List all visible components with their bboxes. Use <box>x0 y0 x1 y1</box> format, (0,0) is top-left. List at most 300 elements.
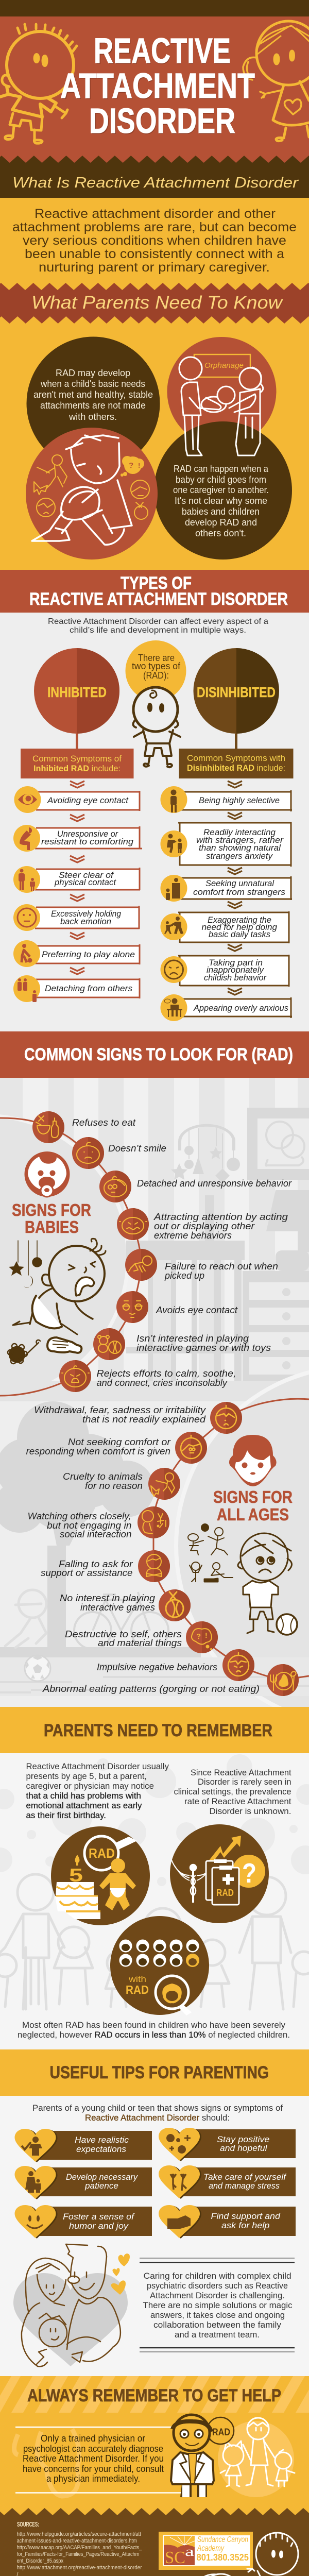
item: unresponsive: resistant to comforting <box>41 837 134 846</box>
title: DISORDER <box>90 102 235 142</box>
heading: parents need to know: What Parents Need To Know <box>31 293 284 313</box>
icon: clipboard: RAD <box>216 1888 234 1898</box>
background: stethoscope <box>14 2429 79 2496</box>
label: falling to ask: Falling to ask for <box>59 1559 133 1569</box>
item: interacting with strangers: strangers anxiety <box>206 851 273 861</box>
tip: stay positive: Stay positive <box>217 2134 270 2144</box>
background: parents section <box>0 1753 309 2049</box>
circle: inhibited <box>34 648 119 749</box>
heading: signs for all ages: SIGNS FOR <box>213 1487 293 1506</box>
text: with RAD: with <box>128 1974 146 1984</box>
label: not seeking comfort: Not seeking comfort or <box>68 1437 171 1447</box>
heading: signs for babies <box>12 1200 91 1236</box>
label: detached: Detached and unresponsive behavior <box>137 1178 292 1189</box>
item: childish behaviour <box>161 955 289 987</box>
icon: girl doodle <box>243 21 309 141</box>
icon: rejects calming <box>59 1360 91 1392</box>
icon: frowning faces and ball <box>37 480 149 519</box>
title <box>60 31 255 142</box>
icon: baby bottle <box>47 1337 81 1353</box>
heading: sources: SOURCES: <box>17 2520 39 2528</box>
label: rejects calming: and connect, cries inconsolably <box>97 1378 228 1388</box>
logo: Sundance Canyon Academy: Academy <box>197 2544 225 2553</box>
text: usual onset: presents by age 5, but a parent, <box>26 1772 147 1781</box>
panel: common signs heading <box>0 1031 309 1078</box>
circle: RAD may develop <box>27 337 160 470</box>
circle: disinhibited: DISINHIBITED <box>197 684 276 700</box>
item: play alone: Preferring to play alone <box>42 950 135 959</box>
icon: doctor: RAD <box>212 2427 230 2438</box>
heading: signs for all ages: ALL AGES <box>217 1505 289 1524</box>
label: doesn't smile: Doesn’t smile <box>108 1143 166 1154</box>
box: inhibited symptoms heading: Common Symptoms of <box>32 754 122 764</box>
icon: child face <box>229 1435 277 1486</box>
box: inhibited symptoms heading <box>21 749 134 778</box>
text: prevalence <box>174 1768 291 1816</box>
item: unresponsive <box>13 825 142 852</box>
top bar <box>0 0 309 16</box>
icon: rattle <box>8 1340 40 1364</box>
label: not interested in toys: interactive games or with toys <box>136 1343 271 1353</box>
icon: caduceus <box>171 1860 214 1903</box>
icon: magnifier <box>84 1836 137 1870</box>
circle: age 5 birthday <box>51 1826 150 1925</box>
text: neglected children: neglected, however RAD occurs in less than 10% of neglected children. <box>18 2030 290 2040</box>
tip: patience: Develop necessary <box>66 2172 138 2182</box>
label: destructive: Destructive to self, others <box>65 1629 182 1639</box>
logo: Sundance Canyon Academy: SC <box>165 2548 185 2567</box>
icon: baby face with pacifier <box>25 1151 70 1197</box>
text: usual onset: emotional attachment as early <box>26 1801 142 1810</box>
label: destructive: and material things <box>98 1638 182 1648</box>
icon: watching others <box>138 1506 169 1538</box>
panel: disinhibited column <box>161 648 294 1021</box>
text: trained physician: psychologist can accurately diagnose <box>23 2444 163 2454</box>
icon: sad sitting boy <box>32 435 132 545</box>
text: caring for children: Caring for children with complex child <box>144 2271 291 2281</box>
icon: orphanage sign <box>194 354 250 377</box>
icon: rising arrow <box>209 1836 241 1863</box>
text: caregiver: RAD can happen when a <box>174 464 269 474</box>
text: prevalence: rate of Reactive Attachment <box>184 1797 291 1806</box>
tip: stay positive <box>159 2128 296 2161</box>
label: attracting attention: extreme behaviors <box>154 1230 232 1241</box>
callout: two types: There are <box>138 653 175 663</box>
text: source links <box>16 2531 142 2576</box>
text: prevalence: clinical settings, the prevalence <box>174 1787 291 1797</box>
text: tips intro: Parents of a young child or teen that shows signs or symptoms of <box>32 2103 283 2113</box>
item: highly selective: Being highly selective <box>199 795 280 805</box>
icon: no interest in playing <box>159 1589 191 1621</box>
label: abnormal eating: Abnormal eating patterns (gorging or not eating) <box>42 1684 260 1694</box>
text: definition: very serious conditions when children have <box>23 233 286 248</box>
icon: clipboard <box>206 1859 239 1905</box>
text: usual onset: Reactive Attachment Disorder usually <box>26 1762 169 1771</box>
icon: orphanage sign: Orphanage <box>204 361 244 370</box>
tip: take care of yourself: Take care of yourself <box>203 2172 287 2182</box>
label: cruelty to animals: for no reason <box>85 1481 143 1491</box>
title: ATTACHMENT <box>60 66 255 106</box>
circle: disinhibited <box>194 648 279 749</box>
label: avoids eye contact: Avoids eye contact <box>156 1305 238 1315</box>
text: source links: http://www.attachment.org/reactive-attachment-disorder <box>16 2565 142 2571</box>
text: definition: attachment problems are rare, but can become <box>12 220 297 234</box>
zigzag edge of header <box>0 156 309 163</box>
text: definition: been unable to consistently connect with a <box>25 247 284 261</box>
background: park <box>0 1364 309 1727</box>
text: prevalence: Disorder is unknown. <box>209 1807 291 1816</box>
item: holding back emotion <box>13 904 140 931</box>
icon: falling to ask <box>138 1550 170 1582</box>
tip: humor and joy <box>14 2205 152 2239</box>
item: interacting with strangers <box>161 822 291 867</box>
tip: stay positive: and hopeful <box>220 2143 268 2153</box>
tip: realistic expectations <box>14 2129 152 2162</box>
text: caregiver <box>173 464 269 538</box>
icon: kicking boy <box>34 455 67 495</box>
panel: parents need to remember heading <box>0 1707 309 1753</box>
text: basic needs: with others. <box>68 412 117 422</box>
label: not seeking comfort: responding when comfort is given <box>26 1446 170 1456</box>
label: not seeking comfort <box>26 1437 171 1456</box>
icon: helping hand <box>167 2215 191 2229</box>
label: impulsive: Impulsive negative behaviors <box>97 1662 217 1672</box>
callout: two types: (RAD): <box>143 670 169 681</box>
icon: destructive: ? <box>196 1632 201 1641</box>
label: destructive <box>65 1629 182 1648</box>
logo: Sundance Canyon Academy <box>159 2532 253 2570</box>
icon: baby in diaper <box>99 1858 136 1910</box>
text: usual onset: caregiver or physician may notice <box>26 1782 154 1791</box>
timeline: signs for babies <box>0 1111 292 1396</box>
text: definition: nurturing parent or primary caregiver. <box>39 260 270 275</box>
label: falling to ask <box>41 1559 133 1578</box>
tip: realistic expectations: expectations <box>76 2144 127 2154</box>
text: basic needs: attachments are not made <box>40 400 146 411</box>
label: rejects calming <box>97 1368 236 1388</box>
box: disinhibited symptoms heading: Disinhibited RAD include: <box>187 763 285 773</box>
text: usual onset: that a child has problems with <box>26 1791 141 1801</box>
icon: thought bubble: ? <box>129 461 133 470</box>
tip: find support: ask for help <box>221 2221 270 2230</box>
logo: Sundance Canyon Academy: a <box>185 2544 195 2559</box>
item: comfort from strangers: Seeking unnatural <box>205 878 274 888</box>
tip: humor and joy: humor and joy <box>69 2221 129 2231</box>
label: rejects calming: Rejects efforts to calm, soothe, <box>97 1368 236 1379</box>
icon: destructive: ! <box>205 1631 208 1639</box>
callout: two types <box>126 640 186 701</box>
item: play alone <box>13 940 140 967</box>
icon: doctor <box>171 2415 234 2497</box>
illustration: sad boy with playing children <box>188 1524 297 1635</box>
label: failure to reach <box>164 1261 278 1281</box>
icon: thought bubble: ! <box>138 462 140 469</box>
item: childish behaviour: inappropriately <box>207 965 264 975</box>
label: watching others: Watching others closely, <box>28 1511 131 1521</box>
text: source links: ent_Disorder_85.aspx <box>16 2558 63 2564</box>
circle: sad boy illustration <box>26 428 158 560</box>
label: no interest in playing: interactive games <box>80 1602 155 1613</box>
text: neglected children <box>18 2020 290 2040</box>
label: failure to reach: picked up <box>164 1270 204 1281</box>
item: holding back emotion: Excessively holding <box>51 909 121 919</box>
background: soccer ball <box>25 1655 50 1681</box>
label: no interest in playing <box>60 1593 155 1613</box>
label: falling to ask: support or assistance <box>41 1568 133 1578</box>
item: exaggerating need: need for help doing <box>202 922 278 932</box>
background: bicycle <box>74 1592 168 1649</box>
text: caring for children: Attachment Disorder is challenging. <box>150 2291 285 2300</box>
label: not interested in toys <box>136 1333 271 1353</box>
heading: types: TYPES OF <box>121 573 192 593</box>
item: holding back emotion: back emotion <box>60 917 111 926</box>
text: caring for children: psychiatric disorders such as Reactive <box>147 2281 288 2291</box>
text: tips intro <box>32 2103 283 2123</box>
label: withdrawal <box>34 1405 206 1425</box>
icon: impulsive <box>222 1649 254 1681</box>
icon: parent and child <box>25 2171 41 2193</box>
text: caregiver: develop RAD and <box>185 517 257 528</box>
zigzag edge of footer <box>0 2508 309 2515</box>
background: sitting boy <box>5 1590 46 1648</box>
icon: magnifier: RAD <box>89 1845 115 1861</box>
panel: what is RAD heading band <box>0 163 309 198</box>
item: exaggerating need: Exaggerating the <box>208 915 271 925</box>
item: childish behaviour: Taking part in <box>209 958 263 968</box>
heading: what is: What Is Reactive Attachment Disorder <box>12 175 299 191</box>
text: with RAD: RAD <box>126 1983 149 1996</box>
icon: birthday cake: 5 <box>69 1865 83 1886</box>
circle: prevalence unknown <box>170 1824 269 1923</box>
tip: find support: Find support and <box>211 2211 281 2221</box>
item: exaggerating need: basic daily tasks <box>209 929 270 939</box>
item: overly anxious <box>161 994 292 1021</box>
icon: ten children grid <box>119 1940 199 1967</box>
text: usual onset <box>26 1762 169 1820</box>
circle: fewer than 10 percent <box>110 1916 209 2015</box>
text: neglected children: Most often RAD has been found in children who have been severely <box>22 2020 285 2030</box>
icon: family circle <box>218 2418 295 2497</box>
text: caregiver: one caregiver to another. <box>173 485 269 495</box>
item: interacting with strangers: than showing natural <box>199 843 281 853</box>
background: mobile <box>171 1124 240 1183</box>
heading: signs for all ages <box>213 1487 293 1524</box>
heading: signs for babies: BABIES <box>25 1217 79 1236</box>
circle: inhibited: INHIBITED <box>47 684 107 700</box>
label: cruelty to animals: Cruelty to animals <box>63 1471 143 1482</box>
label: no interest in playing: No interest in playing <box>60 1593 155 1603</box>
box: disinhibited symptoms heading <box>179 749 294 778</box>
text: types intro: Reactive Attachment Disorder can affect every aspect of a <box>48 617 268 626</box>
item: childish behaviour: childish behavior <box>204 973 267 982</box>
text: basic needs: when a child's basic needs <box>40 379 145 389</box>
text: prevalence: Disorder is rarely seen in <box>198 1777 291 1787</box>
icon: magnified child <box>156 1976 192 2015</box>
icon: boy shrugging <box>133 687 180 767</box>
item: interacting with strangers: Readily interacting <box>203 827 276 837</box>
background: framed mother and child <box>266 1122 304 1165</box>
text: trained physician <box>23 2433 164 2484</box>
label: not interested in toys: Isn’t interested in playing <box>136 1333 249 1344</box>
panel: types body background <box>0 613 309 1031</box>
icon: cruelty to animals <box>148 1468 180 1500</box>
text: tips intro: Reactive Attachment Disorder should: <box>85 2113 230 2123</box>
heading: signs for babies: SIGNS FOR <box>12 1200 91 1219</box>
item: comfort from strangers <box>161 875 292 902</box>
item: highly selective <box>161 786 292 813</box>
tip: patience: patience <box>84 2181 118 2191</box>
illustration: crying baby <box>9 1239 106 1334</box>
background: gray family <box>0 1874 309 2009</box>
illustration: adults handing over baby <box>179 357 263 455</box>
text: definition: Reactive attachment disorder and other <box>35 207 276 221</box>
circle: caregiver text <box>154 421 292 560</box>
panel: types of RAD heading <box>0 570 309 613</box>
label: cruelty to animals <box>63 1471 143 1491</box>
text: caring for children: and a treatment team. <box>175 2330 260 2340</box>
box: disinhibited symptoms heading: Common Symptoms with <box>187 753 285 763</box>
item: interacting with strangers: with strangers, rather <box>196 835 284 845</box>
background: nursery <box>0 1078 309 1400</box>
label: withdrawal: that is not readily explained <box>82 1414 206 1425</box>
panel: yellow background <box>0 324 309 570</box>
icon: smile <box>27 2215 43 2228</box>
panel: inhibited column <box>13 648 142 1002</box>
item: detaching from others: Detaching from others <box>45 984 133 993</box>
text: caring for children: There are no simple solutions or magic <box>143 2300 293 2310</box>
icon: baby with tick <box>22 2137 42 2156</box>
icon: refuses to eat <box>32 1111 64 1143</box>
label: failure to reach: Failure to reach out when <box>165 1261 278 1272</box>
label: watching others <box>28 1511 132 1539</box>
icon: abnormal eating <box>267 1664 299 1696</box>
tip: realistic expectations: Have realistic <box>75 2135 129 2145</box>
icon: yoga figures <box>170 2174 186 2191</box>
icon: boy doodle <box>0 24 77 143</box>
icon: thought bubble <box>121 456 144 477</box>
text: types intro <box>48 617 268 635</box>
panel: footer <box>0 2515 309 2576</box>
icon: failure to reach <box>125 1249 157 1281</box>
icon: white boy doodle <box>247 2533 298 2576</box>
icon: birthday cake <box>55 1855 100 1919</box>
icon: question badge: ? <box>242 1858 256 1889</box>
item: steer clear <box>13 866 140 893</box>
callout: two types: two types of <box>132 661 181 671</box>
text: caring for children: collaboration between the family <box>153 2320 281 2330</box>
label: watching others: social interaction <box>60 1529 132 1539</box>
heading: useful tips: USEFUL TIPS FOR PARENTING <box>49 2063 269 2082</box>
panel: what is RAD text <box>0 198 309 283</box>
text: with RAD <box>126 1974 149 1996</box>
title: REACTIVE <box>95 32 231 72</box>
circle: orphanage illustration <box>167 337 276 446</box>
panel: always remember <box>0 2376 309 2509</box>
text: basic needs: RAD may develop <box>56 368 130 378</box>
text: usual onset: as their first birthday. <box>26 1811 106 1820</box>
illustration: hugging family <box>13 2244 130 2366</box>
title: REACTIVE <box>94 31 231 71</box>
text: source links: for_Families/Facts-for_Families_Pages/Reactive_Attachm <box>16 2551 139 2557</box>
text: trained physician: have concerns for your child, consult <box>23 2464 164 2474</box>
text: basic needs <box>33 368 153 422</box>
tip: take care of yourself <box>159 2165 296 2199</box>
panel: tips background <box>0 2096 309 2376</box>
icon: flowers and plus signs <box>166 2134 191 2154</box>
icon: detached <box>99 1171 131 1202</box>
tip: patience <box>14 2166 152 2199</box>
title: ATTACHMENT <box>61 67 255 107</box>
timeline: signs for all ages <box>26 1399 309 1696</box>
tip: take care of yourself: and manage stress <box>209 2181 280 2191</box>
icon: not seeking comfort <box>175 1432 207 1464</box>
text: definition <box>12 207 297 275</box>
heading: parents need to remember: PARENTS NEED TO REMEMBER <box>44 1721 272 1740</box>
icon: destructive <box>186 1621 218 1653</box>
panel: useful tips heading <box>0 2049 309 2096</box>
text: trained physician: a physician immediately. <box>46 2473 140 2484</box>
text: basic needs: aren't met and healthy, stable <box>33 389 153 400</box>
text: caregiver: others don't. <box>195 528 246 538</box>
text: caring for children <box>140 2258 295 2352</box>
logo: Sundance Canyon Academy: 801.380.3525 <box>197 2552 249 2563</box>
text: types intro: child’s life and development in multiple ways. <box>70 626 246 635</box>
text: caregiver: babies and children <box>182 506 260 517</box>
text: caregiver: It's not clear why some <box>175 496 267 506</box>
tip: find support <box>159 2205 296 2239</box>
item: unresponsive: Unresponsive or <box>57 829 118 839</box>
item: detaching from others <box>13 975 140 1002</box>
item: steer clear: Steer clear of <box>59 870 114 880</box>
text: caring for children: answers, it takes close and ongoing <box>150 2310 285 2320</box>
text: source links: achment-issues-and-reactive-attachment-disorders.htm <box>16 2538 137 2544</box>
text: trained physician: Only a trained physician or <box>41 2433 145 2444</box>
icon: question badge <box>232 1855 265 1889</box>
icon: not interested in toys <box>93 1328 125 1360</box>
icon: doesn't smile <box>72 1137 104 1169</box>
tip: humor and joy: Foster a sense of <box>63 2212 135 2222</box>
text: caregiver: baby or child goes from <box>176 474 266 485</box>
item: exaggerating need <box>161 911 289 943</box>
item: avoiding eye contact <box>14 786 140 813</box>
label: withdrawal: Withdrawal, fear, sadness or irritability <box>34 1405 206 1415</box>
item: overly anxious: Appearing overly anxious <box>193 1003 288 1013</box>
icon: attracting attention <box>117 1208 149 1240</box>
panel: header <box>0 16 309 156</box>
panel: parents need to know <box>0 283 309 324</box>
text: source links: http://www.helpguide.org/articles/secure-attachment/att <box>16 2531 141 2537</box>
label: attracting attention <box>153 1212 288 1241</box>
box: inhibited symptoms heading: Inhibited RAD include: <box>33 764 121 773</box>
icon: avoids eye contact <box>116 1291 148 1323</box>
title: DISORDER <box>89 101 235 141</box>
logo: Sundance Canyon Academy: Sundance Canyon <box>197 2535 248 2544</box>
text: trained physician: Reactive Attachment Disorder. If you <box>23 2453 164 2464</box>
item: comfort from strangers: comfort from strangers <box>193 887 286 897</box>
label: attracting attention: out or displaying other <box>154 1221 255 1231</box>
icon: withdrawal <box>210 1402 242 1434</box>
item: avoiding eye contact: Avoiding eye contact <box>47 795 129 805</box>
text: source links: http://www.aacap.org/AACAP/Families_and_Youth/Facts_ <box>16 2545 142 2551</box>
label: watching others: but not engaging in <box>47 1520 132 1531</box>
icon: white girl doodle <box>165 2574 239 2576</box>
text: prevalence: Since Reactive Attachment <box>191 1768 291 1777</box>
rule lines <box>15 2427 181 2493</box>
label: attracting attention: Attracting attention by acting <box>153 1212 288 1222</box>
icon: yellow hearts <box>111 2253 130 2295</box>
label: refuses to eat: Refuses to eat <box>72 1117 136 1128</box>
item: steer clear: physical contact <box>54 877 116 887</box>
